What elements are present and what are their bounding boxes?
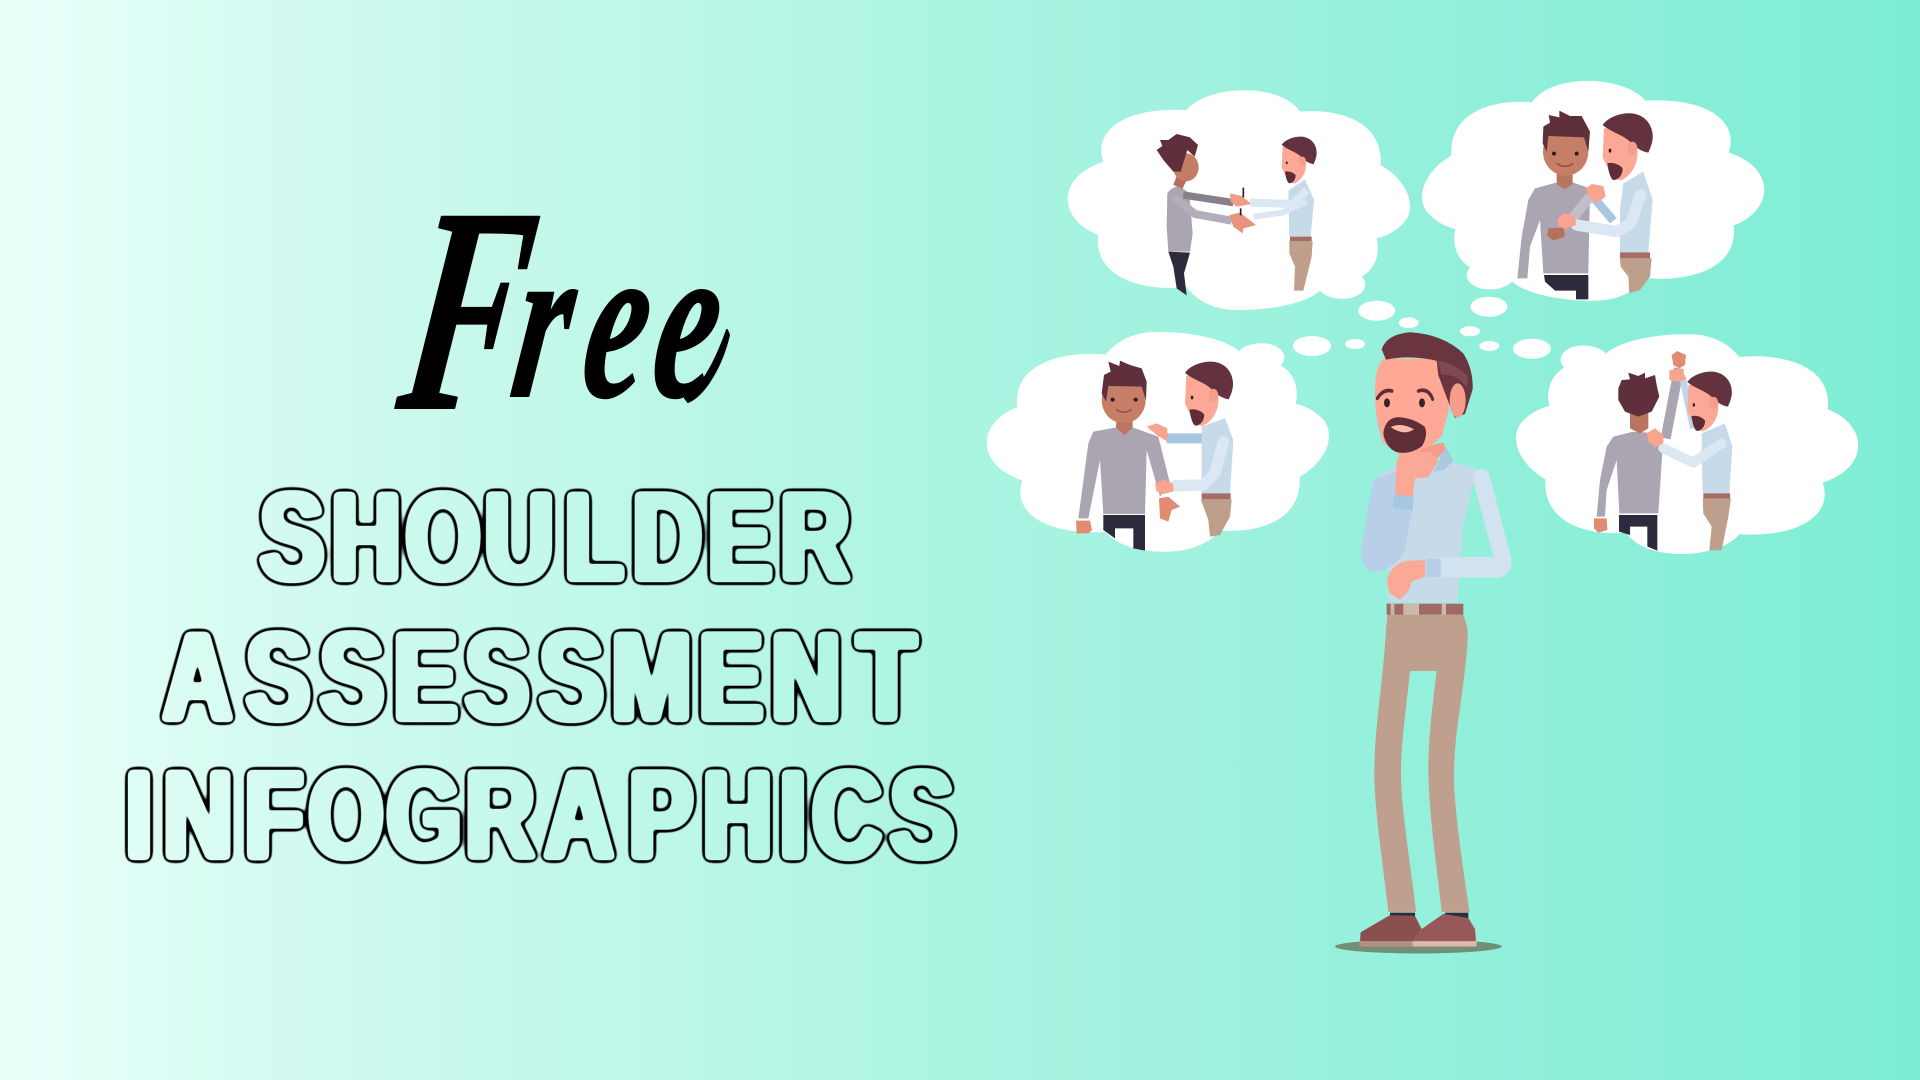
shoes [1359,913,1477,947]
title flourish: brush tail [685,330,729,402]
title: Free: ree [501,195,738,445]
ground shadow [1335,940,1502,953]
thought cloud: bottom right [1516,334,1858,554]
heading: SHOULDER ASSESSMENT INFOGRAPHICS [126,467,954,885]
thought cloud: top left [1068,90,1410,310]
extended arm sleeve [1440,479,1503,567]
title: Free [385,148,745,471]
heading line: SHOULDER: SHOULDER [260,467,850,607]
head [1375,332,1473,456]
belt [1387,604,1463,615]
scene: arm support, front view [1076,361,1233,551]
thought cloud: top right [1422,81,1764,301]
scene: arm hold, profile view [1157,134,1317,295]
scene: shoulder check, front view [1517,111,1653,299]
collar [1433,447,1453,472]
character: thinking man [1335,332,1503,953]
thought trail bubbles [1293,297,1551,359]
neck [1410,442,1447,461]
heading line: ASSESSMENT: ASSESSMENT [163,607,916,747]
raised arm sleeve [1361,471,1413,572]
scene: arm raise, back view [1594,351,1732,551]
title: Free: F [386,148,552,471]
trousers [1374,615,1469,912]
lower hand [1387,560,1425,600]
heading line: INFOGRAPHICS: INFOGRAPHICS [126,745,954,885]
chin hand [1395,451,1438,496]
shirt torso [1372,461,1477,602]
thought cloud: bottom left [987,332,1329,552]
